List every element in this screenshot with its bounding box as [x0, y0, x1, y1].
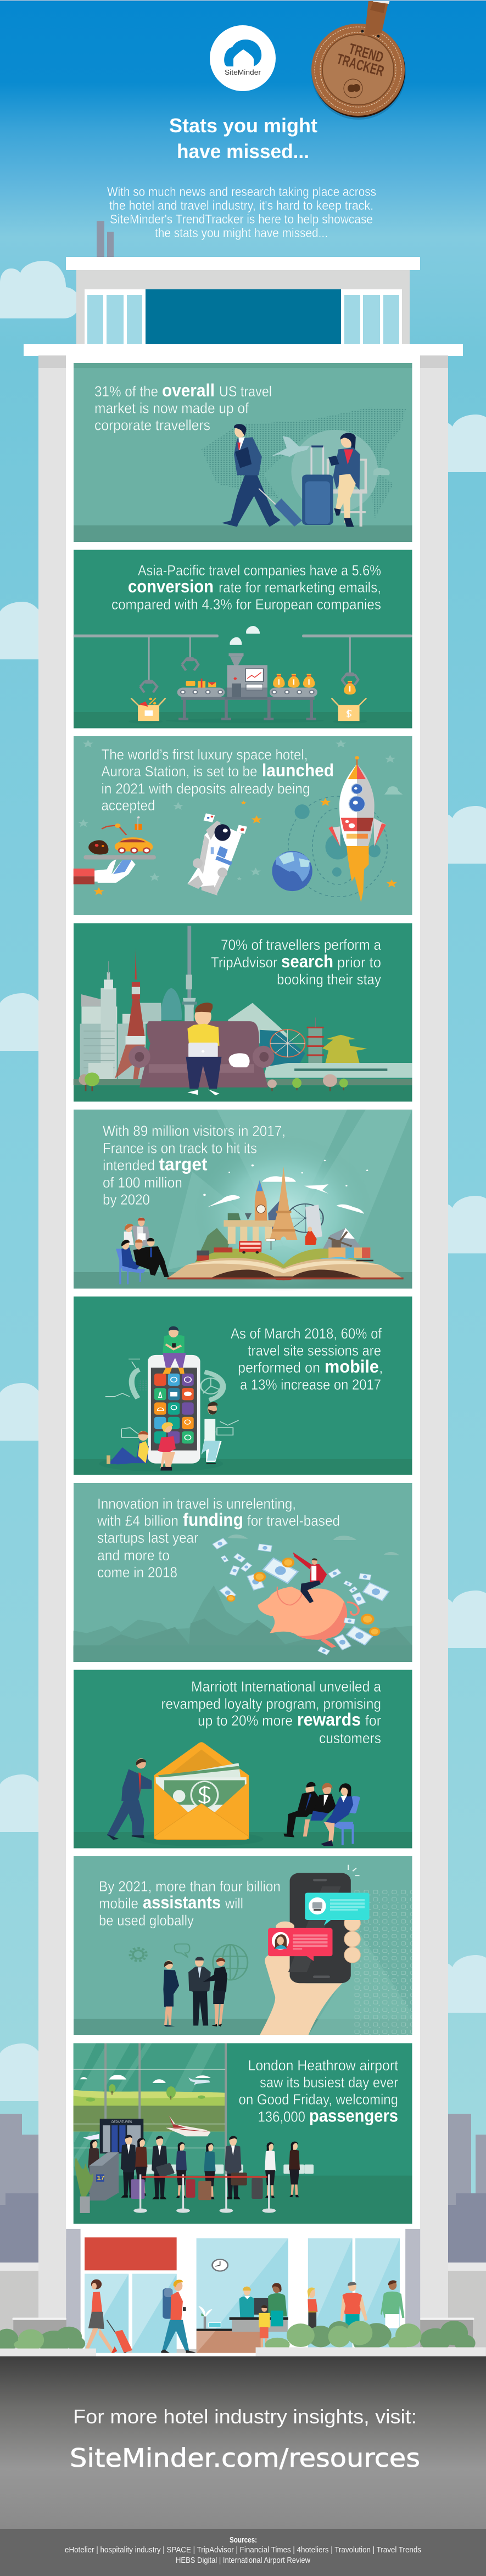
intro text: the hotel and travel industry, it's hard to keep track. [109, 198, 373, 212]
illustration: open book with landmarks [116, 1110, 412, 1292]
panel: space hotel [74, 736, 412, 915]
tag wording [335, 38, 389, 80]
stat text: travel site sessions are [248, 1342, 381, 1359]
stat text: booking their stay [277, 971, 381, 988]
reception desk [197, 2283, 288, 2353]
stat text: on Good Friday, welcoming [238, 2091, 398, 2108]
stat text: The world’s first luxury space hotel, [101, 747, 308, 763]
stat text: 136,000 [258, 2108, 305, 2125]
panel: Heathrow passengers [74, 2043, 412, 2224]
SiteMinder logo: SiteMinder [225, 68, 261, 76]
footer call to action [0, 2356, 486, 2529]
stat text: With 89 million visitors in 2017, [103, 1123, 286, 1139]
stat text [103, 1123, 286, 1208]
stat text: mobile [325, 1357, 379, 1376]
illustration: airport check-in queue: DEPARTURES [111, 2120, 132, 2124]
stat text: customers [319, 1730, 381, 1746]
stat text: up to 20% more [198, 1712, 293, 1729]
stat text: compared with 4.3% for European companies [111, 596, 381, 613]
woman with suitcase [79, 2280, 132, 2355]
stat text: market is now made up of [94, 400, 249, 416]
stat text [231, 1325, 383, 1393]
stat text: rate for remarketing emails, [219, 579, 381, 596]
stat text: rewards [297, 1710, 361, 1729]
panel: TripAdvisor search [74, 923, 412, 1101]
stat text: prior to [337, 954, 381, 971]
stat text [101, 747, 334, 814]
stat text: and more to [97, 1547, 170, 1564]
stat text: target [159, 1154, 208, 1174]
illustration: traveller on sofa before Tokyo skyline [74, 926, 412, 1095]
stat text: be used globally [99, 1912, 194, 1929]
title: have missed... [177, 140, 309, 163]
title [169, 114, 317, 163]
stat text: Innovation in travel is unrelenting, [97, 1496, 296, 1512]
intro text [107, 184, 376, 240]
stat text: TripAdvisor [211, 954, 277, 971]
tag wording: TRACKER [335, 51, 386, 80]
stat text: saw its busiest day ever [260, 2074, 398, 2091]
stat text: France is on track to hit its [103, 1140, 257, 1156]
stat text: 31% of the [94, 383, 158, 400]
stat text [97, 1496, 340, 1581]
stat text: US travel [219, 383, 272, 400]
panel: France visitors [74, 1110, 412, 1292]
stat text: of 100 million [103, 1174, 182, 1191]
stat text: Aurora Station, is set to be [101, 763, 257, 780]
SiteMinder logo [210, 25, 276, 91]
background cityscape [0, 2114, 486, 2356]
stat text: accepted [101, 797, 155, 814]
stat text: Marriott International unveiled a [191, 1678, 382, 1695]
panel: corporate travellers [74, 363, 412, 542]
stat text [211, 937, 382, 988]
stat text [99, 1878, 281, 1929]
illustration: conveyor machine [74, 626, 412, 724]
sources bar: HEBS Digital | International Airport Review [176, 2556, 310, 2565]
stat text: startups last year [97, 1530, 198, 1546]
illustration: hand holding phone with chat bubbles [130, 1865, 412, 2036]
illustration: envelope of money [107, 1742, 360, 1846]
panel: remarketing conversion [74, 550, 412, 728]
stat text: Asia-Pacific travel companies have a 5.6% [138, 562, 381, 579]
intro text: the stats you might have missed... [155, 226, 328, 240]
panel: mobile assistants [74, 1856, 412, 2036]
hedges [0, 2321, 476, 2354]
stat text: overall [162, 380, 215, 400]
tag wording: TREND [347, 40, 386, 66]
clock [213, 2259, 228, 2271]
red sign [85, 2237, 177, 2270]
leather tag: Trend Tracker [311, 0, 406, 120]
footer call to action: SiteMinder.com/resources [70, 2443, 420, 2473]
illustration: airport check-in queue: 17 [97, 2175, 104, 2181]
illustration: phone with people [99, 1326, 239, 1471]
stat text: mobile [99, 1895, 138, 1912]
stat text: corporate travellers [94, 417, 210, 434]
stat text: launched [262, 760, 334, 780]
stat text: a 13% increase on 2017 [240, 1376, 381, 1393]
footer call to action: For more hotel industry insights, visit: [73, 2405, 417, 2428]
illustration: space scene [74, 740, 403, 903]
stat text: in 2021 with deposits already being [101, 781, 310, 797]
stat text: conversion [128, 576, 214, 596]
illustration: flying piggy bank [74, 1535, 412, 1662]
sources bar: eHotelier | hospitality industry | SPACE | TripAdvisor | Financial Times | 4hoteliers | Travolution | Travel Trends [65, 2545, 421, 2555]
side clouds [0, 261, 486, 2101]
stat text [238, 2057, 398, 2126]
stat text: As of March 2018, 60% of [231, 1325, 382, 1342]
stat text [161, 1678, 382, 1746]
panel: mobile sessions [74, 1297, 412, 1475]
stat text: by 2020 [103, 1191, 150, 1208]
hotel roof floor [24, 221, 463, 356]
panel: startup funding [74, 1483, 412, 1662]
stat text: assistants [143, 1892, 221, 1912]
stat text: , [379, 1359, 383, 1376]
stat text: will [225, 1895, 243, 1912]
stat text [94, 380, 272, 434]
pavements [0, 2347, 486, 2356]
backpacker [161, 2280, 196, 2355]
stat text [111, 562, 381, 613]
hotel body [38, 355, 448, 2318]
stat text: come in 2018 [97, 1564, 177, 1581]
stat text: By 2021, more than four billion [99, 1878, 281, 1895]
illustration: business travellers [202, 408, 406, 527]
bystanders behind hedge [308, 2280, 404, 2328]
panel: Marriott rewards [74, 1670, 412, 1848]
ground floor hotel entrance [0, 2229, 486, 2356]
stat text: search [281, 951, 333, 971]
intro text: With so much news and research taking place across [107, 184, 376, 199]
stat text: revamped loyalty program, promising [161, 1695, 381, 1712]
shop windows [85, 2238, 400, 2353]
sources bar [0, 2529, 486, 2576]
stat text: funding [183, 1510, 243, 1530]
stat text: 70% of travellers perform a [221, 937, 382, 953]
stat text: for [365, 1712, 381, 1729]
sources bar: Sources: [230, 2535, 257, 2545]
stat text: intended [103, 1157, 155, 1174]
stat text: passengers [309, 2106, 398, 2126]
illustration: airport check-in queue [74, 2043, 412, 2224]
stat text: performed on [238, 1359, 320, 1376]
stat text: London Heathrow airport [248, 2057, 398, 2074]
intro text: SiteMinder's TrendTracker is here to help showcase [110, 212, 373, 226]
stat text: for travel-based [247, 1513, 340, 1529]
stat text: with £4 billion [97, 1513, 178, 1529]
title: Stats you might [169, 114, 317, 137]
top edge line [0, 0, 486, 1]
